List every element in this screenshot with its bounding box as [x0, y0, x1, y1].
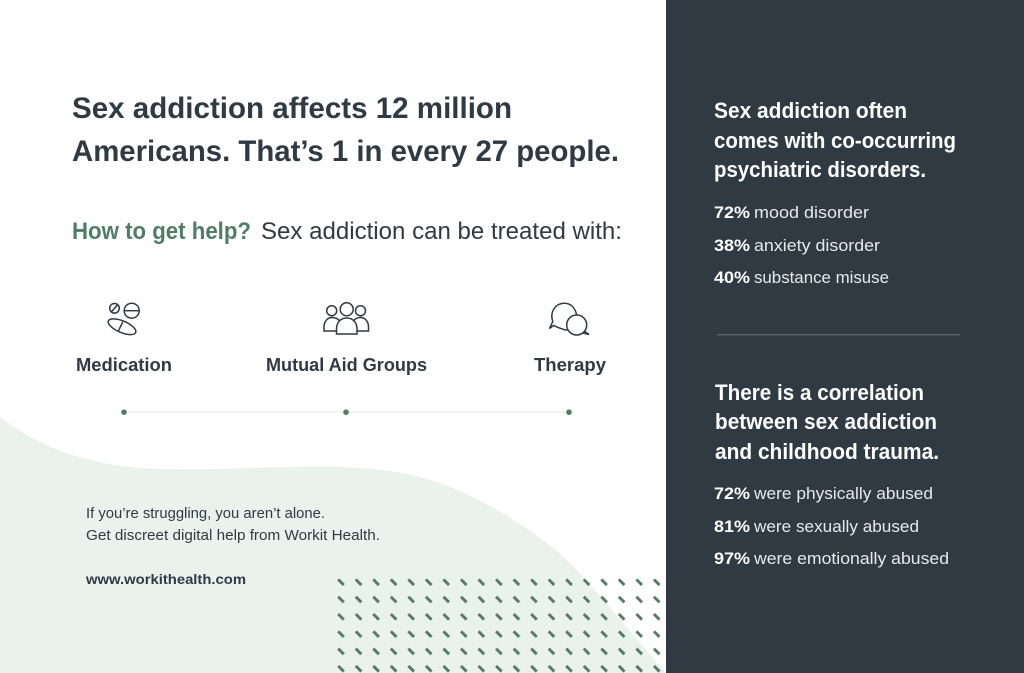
label: medication: Medication	[76, 355, 172, 375]
heading: co-occurring disorders: comes with co-occurring	[714, 128, 956, 153]
treatment: therapy	[534, 303, 606, 375]
subheading: how to get help	[72, 218, 622, 245]
website link: www.workithealth.com	[85, 571, 246, 587]
stats: childhood trauma: were physically abused	[753, 484, 933, 503]
stats: psychiatric disorders: mood disorder	[754, 203, 869, 222]
timeline with dots	[121, 409, 572, 415]
stats: childhood trauma	[714, 484, 949, 568]
stats: psychiatric disorders: anxiety disorder	[754, 236, 880, 255]
panel: statistics	[666, 0, 1024, 673]
title	[72, 92, 619, 168]
support message	[86, 505, 380, 544]
stats: childhood trauma: were emotionally abused	[753, 549, 949, 568]
stats: psychiatric disorders: 38%	[714, 236, 750, 255]
title: Sex addiction affects 12 million	[72, 92, 512, 125]
heading: co-occurring disorders	[714, 98, 956, 182]
dash pattern	[336, 574, 662, 673]
stats: psychiatric disorders: 40%	[714, 268, 750, 287]
stats: childhood trauma: 81%	[714, 517, 750, 536]
heading: childhood trauma: There is a correlation	[715, 380, 924, 405]
heading: childhood trauma	[715, 380, 939, 464]
heading: childhood trauma: between sex addiction	[715, 409, 937, 434]
background wave	[0, 417, 666, 673]
treatment: mutual aid groups	[266, 303, 427, 375]
title: Americans. That’s 1 in every 27 people.	[72, 135, 619, 168]
stats: childhood trauma: were sexually abused	[753, 517, 919, 536]
stats: childhood trauma: 72%	[714, 484, 750, 503]
stats: childhood trauma: 97%	[714, 549, 750, 568]
icon: pills	[106, 303, 139, 338]
stats: psychiatric disorders	[714, 203, 889, 287]
subheading: how to get help: How to get help?	[72, 218, 251, 245]
stats: psychiatric disorders: 72%	[714, 203, 750, 222]
support message: Get discreet digital help from Workit Health.	[86, 527, 380, 544]
heading: co-occurring disorders: Sex addiction often	[714, 98, 907, 123]
support message: If you’re struggling, you aren’t alone.	[86, 505, 325, 522]
icon: speech bubbles	[550, 303, 589, 335]
label: mutual aid groups: Mutual Aid Groups	[266, 355, 427, 375]
heading: childhood trauma: and childhood trauma.	[715, 439, 939, 464]
heading: co-occurring disorders: psychiatric disorders.	[714, 157, 926, 182]
subheading: how to get help: Sex addiction can be treated with:	[261, 218, 622, 245]
stats: psychiatric disorders: substance misuse	[754, 268, 889, 287]
label: therapy: Therapy	[534, 355, 606, 375]
icon: group of people	[324, 303, 368, 334]
treatment: medication	[76, 303, 172, 375]
